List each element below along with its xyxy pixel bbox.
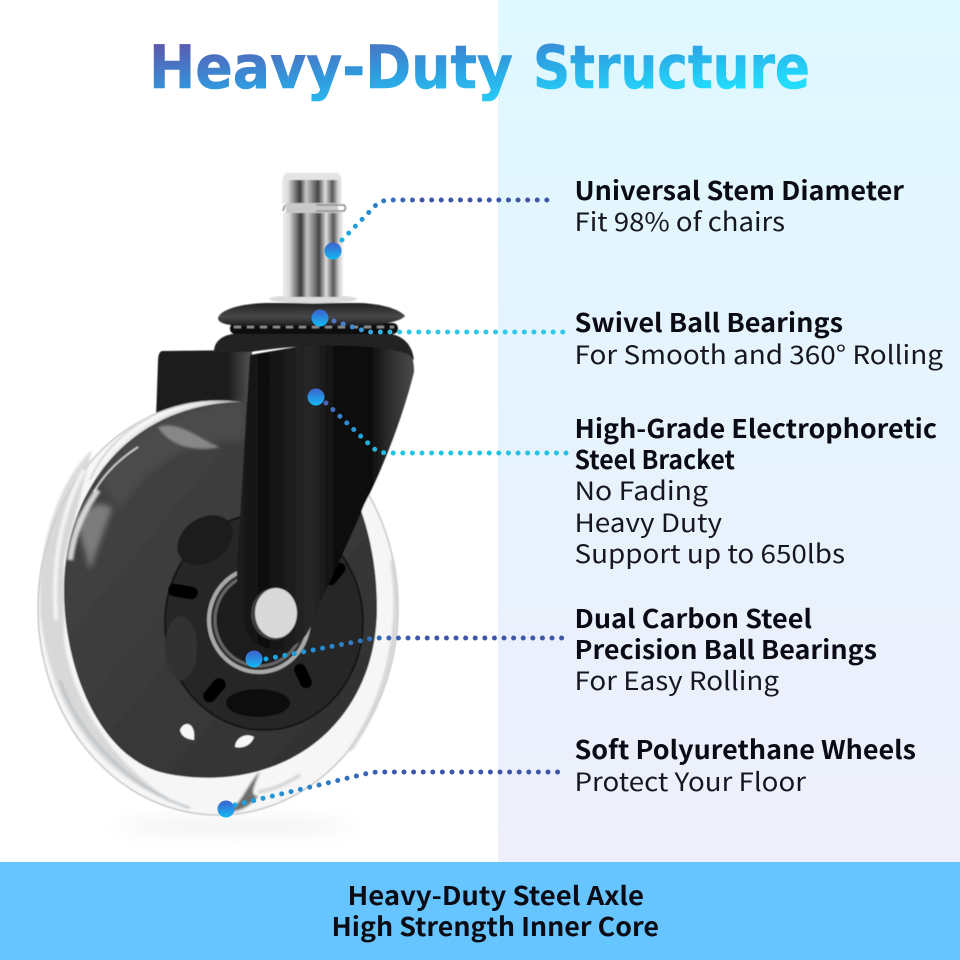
callout: dual carbon steel bearings: For Easy Rolling [574, 661, 780, 698]
callout: dual carbon steel bearings [574, 599, 877, 698]
footer band: High Strength Inner Core [332, 907, 659, 944]
panel: light blue right background [498, 0, 960, 862]
title: Heavy-Duty [149, 33, 513, 103]
bottom rim crease [225, 771, 260, 812]
retaining clip [283, 205, 346, 211]
callout: steel bracket: High-Grade Electrophoretic [574, 409, 937, 446]
title [149, 33, 810, 103]
callout: swivel ball bearings: Swivel Ball Bearings [574, 303, 843, 340]
hub [165, 514, 363, 730]
leader: steel bracket [308, 388, 568, 453]
title: Structure [533, 33, 810, 103]
bracket glint [236, 342, 308, 349]
clear outer rim [38, 401, 398, 815]
chrome stem [283, 212, 343, 297]
swivel lower dome [214, 333, 414, 360]
ball bearings [230, 323, 398, 334]
dark tread [64, 402, 377, 778]
callout: steel bracket: Support up to 650lbs [574, 534, 845, 571]
illustration: office chair caster wheel [38, 173, 414, 833]
callout: dual carbon steel bearings: Dual Carbon Steel [574, 599, 812, 636]
callout: steel bracket: No Fading [574, 471, 709, 508]
leader: dual carbon steel bearings [246, 638, 566, 668]
wheel [38, 401, 398, 815]
callout: soft polyurethane wheels [574, 730, 916, 799]
bracket back side [156, 350, 252, 418]
callout: universal stem diameter [574, 171, 905, 239]
callout: dual carbon steel bearings: Precision Ball Bearings [574, 630, 877, 667]
footer band: Heavy-Duty Steel Axle [348, 876, 644, 913]
callout: universal stem diameter: Universal Stem Diameter [574, 171, 905, 208]
bracket front plate [237, 341, 414, 650]
floor shadow [115, 819, 355, 833]
leader: swivel ball bearings [312, 310, 566, 332]
white tread holes [180, 724, 194, 740]
axle bolt head [251, 588, 297, 640]
hub pockets and slots [165, 616, 197, 680]
swivel top cap [218, 303, 405, 326]
callout: soft polyurethane wheels: Soft Polyurethane Wheels [574, 730, 916, 767]
leader: universal stem diameter [324, 200, 556, 260]
callout: universal stem diameter: Fit 98% of chairs [574, 202, 785, 239]
axle bearing ring [209, 568, 309, 672]
callout: swivel ball bearings [574, 303, 944, 372]
callout: swivel ball bearings: For Smooth and 360° Rolling [574, 335, 944, 372]
callout: steel bracket: Steel Bracket [574, 440, 735, 477]
footer band [0, 862, 960, 960]
leader: polyurethane wheels [218, 772, 562, 818]
callout: steel bracket [574, 409, 937, 571]
callout: steel bracket: Heavy Duty [574, 503, 722, 540]
stem flange [269, 294, 357, 304]
callout: soft polyurethane wheels: Protect Your Floor [574, 762, 806, 799]
